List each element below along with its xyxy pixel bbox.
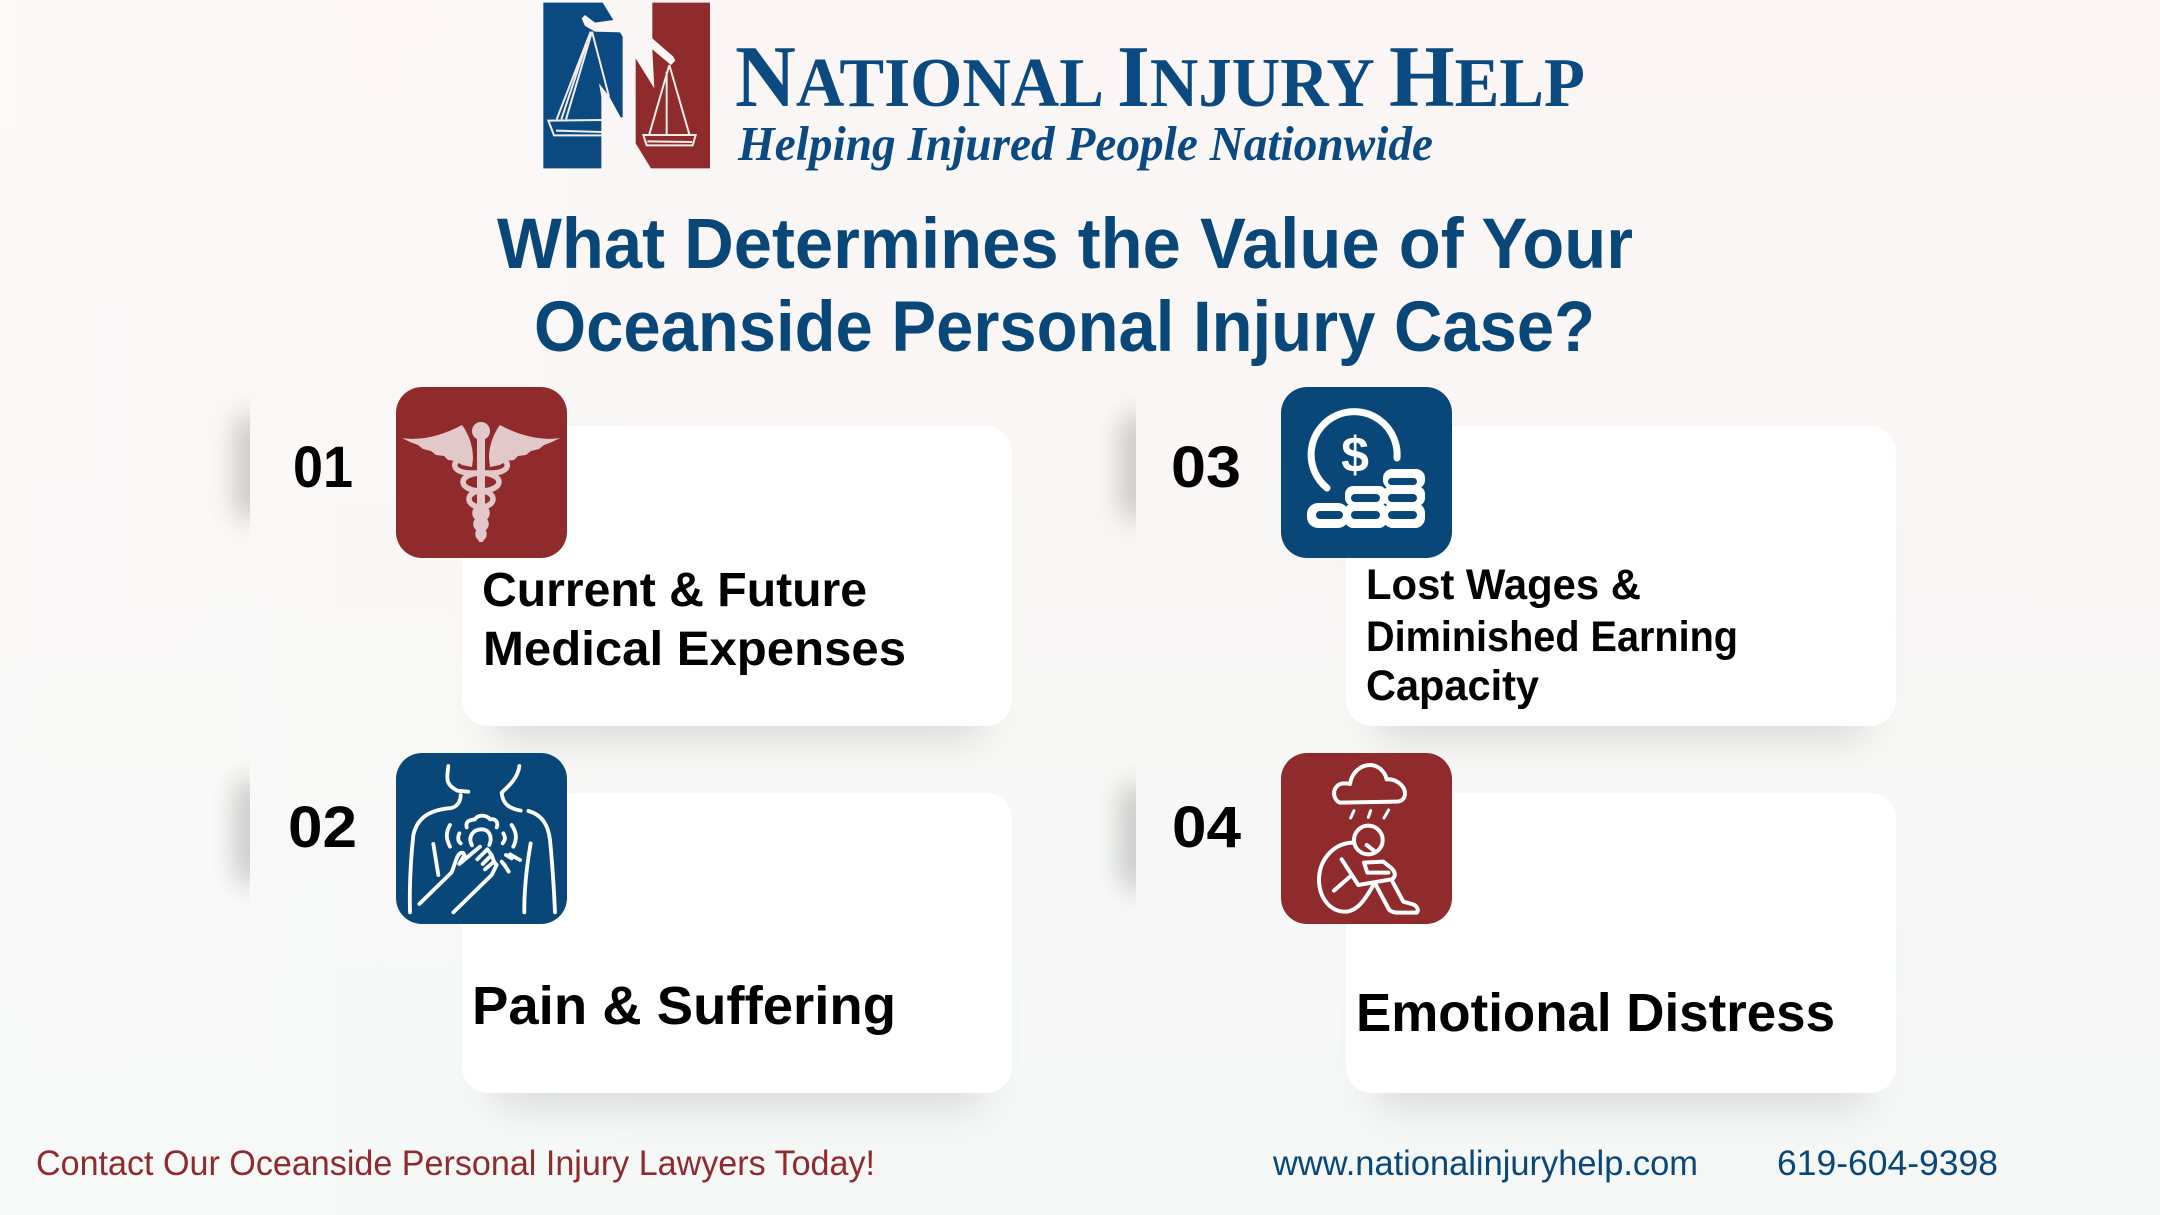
label: Emotional Distress	[1356, 983, 1835, 1043]
card	[1346, 793, 1896, 1107]
footer: phone: 619-604-9398	[1777, 1144, 1998, 1183]
footer: website: www.nationalinjuryhelp.com	[1272, 1144, 1698, 1183]
item 04: emotional distress	[1124, 753, 1896, 1107]
title: What Determines the Value of Your	[497, 205, 1633, 284]
item 01: current and future medical expenses	[238, 387, 1012, 740]
item 03: lost wages and diminished earning capacity	[1124, 387, 1896, 740]
title: Oceanside Personal Injury Case?	[534, 288, 1595, 367]
logo mark: scales of justice	[543, 3, 710, 168]
label: Diminished Earning	[1366, 613, 1738, 661]
icon: coins and dollar: $	[1341, 427, 1369, 483]
icon: coins and dollar	[1281, 387, 1452, 558]
number backdrop shadow	[1124, 787, 1150, 887]
icon: caduceus	[396, 387, 567, 558]
label: Capacity	[1366, 662, 1539, 710]
number 03: 03	[1171, 435, 1241, 500]
number backdrop shadow	[238, 782, 264, 882]
card	[462, 793, 1012, 1107]
label: Current & Future	[482, 564, 867, 617]
number 01: 01	[293, 435, 353, 500]
label	[1366, 561, 1738, 710]
logo: National Injury Help	[543, 3, 1585, 171]
logo wordmark: NATIONAL INJURY HELP	[735, 29, 1585, 126]
number backdrop shadow	[238, 417, 264, 517]
logo tagline: Helping Injured People Nationwide	[737, 116, 1433, 171]
number 04: 04	[1172, 795, 1241, 860]
label: Medical Expenses	[483, 623, 906, 676]
number backdrop shadow	[1124, 417, 1150, 517]
label	[482, 564, 906, 676]
number 02: 02	[288, 795, 357, 860]
title	[497, 205, 1633, 367]
footer: call to action: Contact Our Oceanside Personal Injury Lawyers Today!	[36, 1144, 875, 1183]
card	[1346, 426, 1896, 740]
item 02: pain and suffering	[238, 753, 1012, 1107]
card	[462, 426, 1012, 740]
icon: chest pain	[396, 753, 567, 924]
icon: sad person under rain cloud	[1281, 753, 1452, 924]
label: Pain & Suffering	[472, 976, 896, 1036]
label: Lost Wages &	[1366, 561, 1641, 609]
